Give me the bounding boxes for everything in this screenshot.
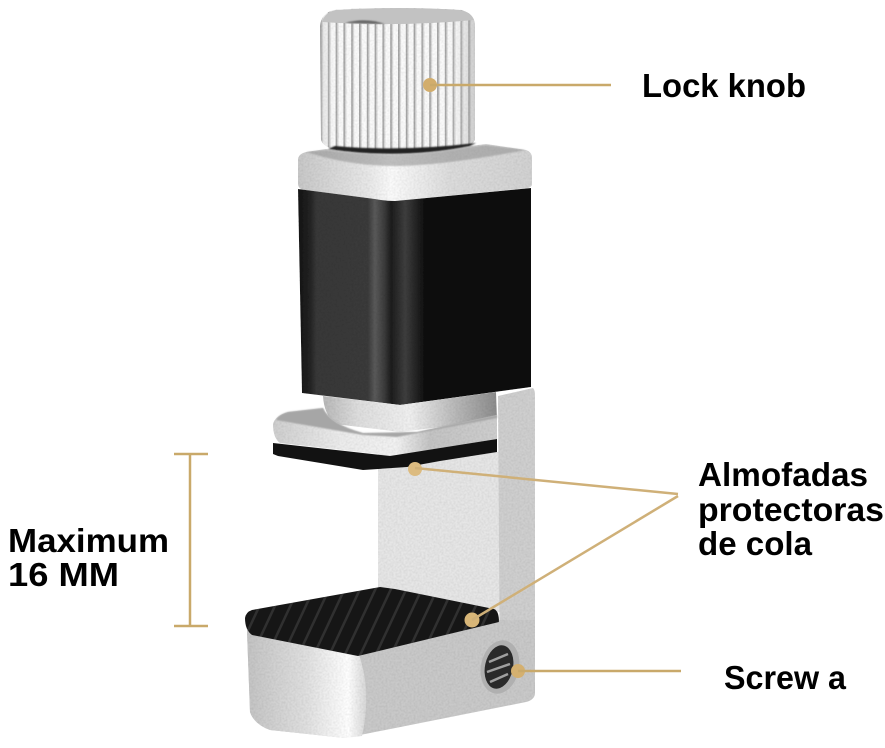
callout line: screw <box>511 664 681 678</box>
label: glue protective pads: protectoras <box>698 491 884 528</box>
knurled lock knob <box>320 8 475 152</box>
label: screw: Screw a <box>724 659 847 696</box>
label: glue protective pads <box>698 456 884 562</box>
upper black pad <box>273 439 497 470</box>
upper metal plate <box>273 408 497 456</box>
black housing <box>298 188 531 405</box>
label: lock knob: Lock knob <box>642 67 806 104</box>
dimension bracket <box>174 454 208 626</box>
right column of the clamp frame <box>498 388 535 706</box>
label: glue protective pads: Almofadas <box>698 456 868 493</box>
callout line: lock knob <box>423 78 611 92</box>
neck below housing <box>323 392 497 432</box>
threaded screw hole <box>476 637 524 697</box>
label: maximum opening: 16 MM <box>8 556 119 593</box>
product photo: clamp <box>245 8 535 738</box>
top cap of housing <box>298 143 532 201</box>
label: maximum opening: Maximum <box>8 522 169 559</box>
lower metal base <box>247 620 535 738</box>
label: maximum opening <box>8 522 169 593</box>
lower black ribbed pad <box>245 587 499 656</box>
label: glue protective pads: de cola <box>698 525 813 562</box>
callout line: lower pad <box>464 496 678 628</box>
callout line: upper pad <box>408 462 678 494</box>
back column of the clamp frame <box>378 452 503 612</box>
